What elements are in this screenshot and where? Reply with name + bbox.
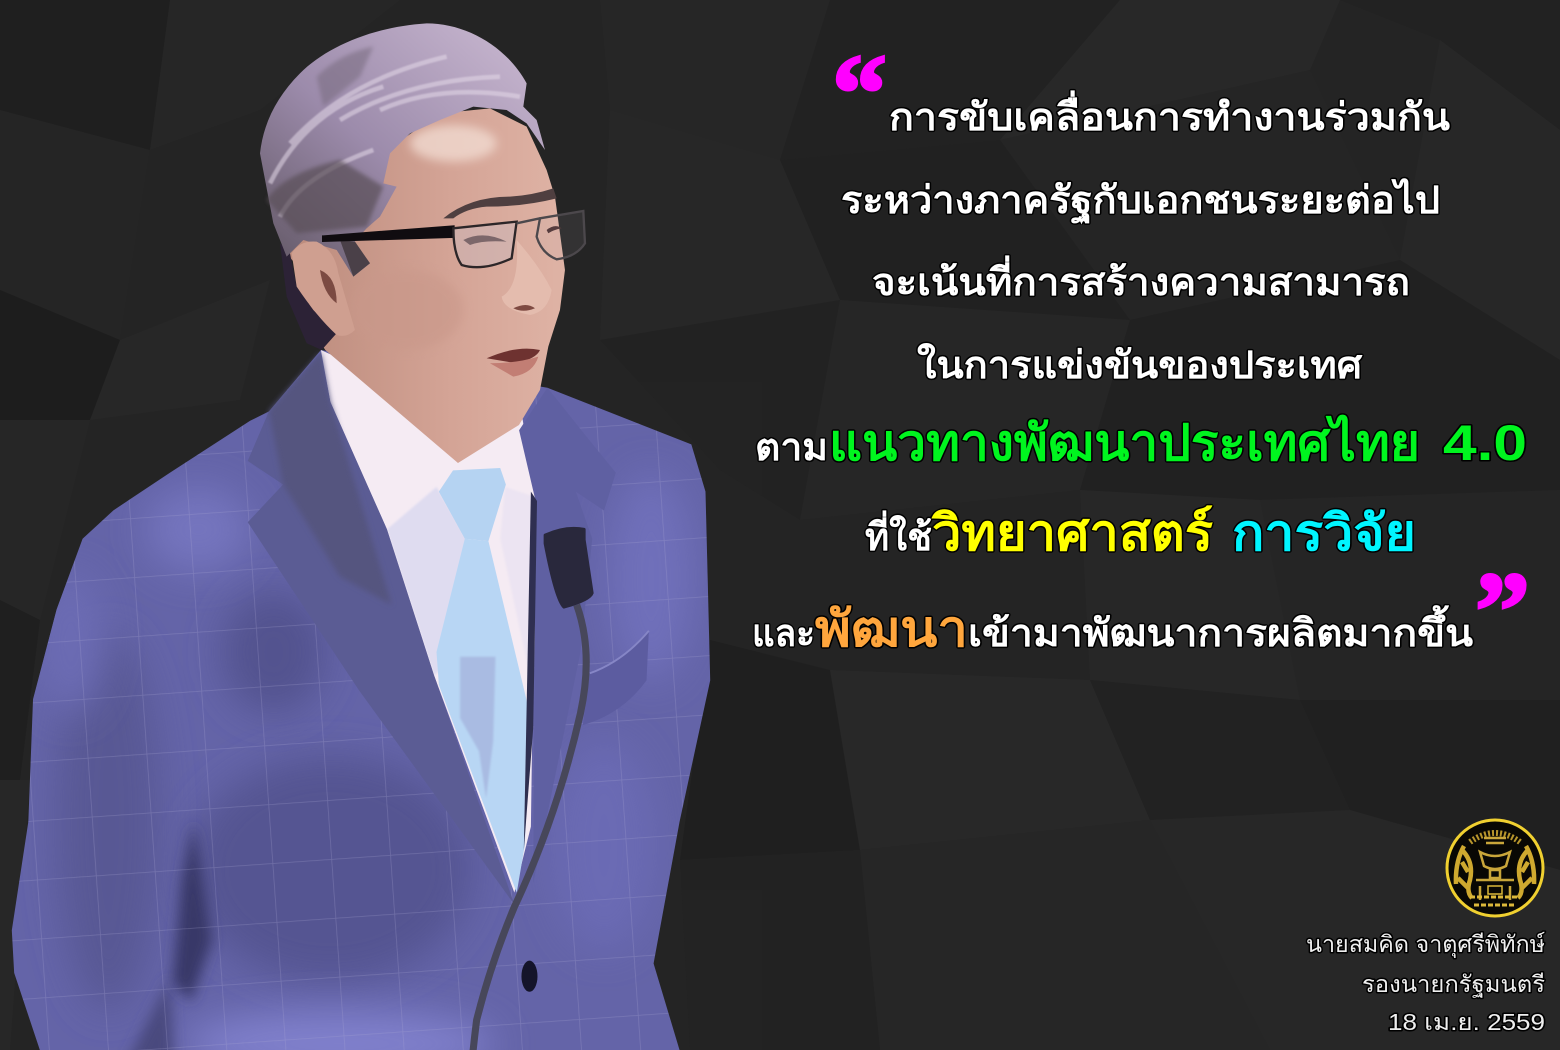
quote text: และ — [752, 613, 815, 655]
quote text: ที่ใช้ — [865, 510, 932, 559]
pocket — [583, 631, 649, 725]
highlight: green phrase: 4.0 — [1443, 415, 1527, 471]
person: speaker with microphone — [0, 23, 740, 1050]
quote text: จะเน้นที่การสร้างความสามารถ — [872, 255, 1410, 304]
highlight: green phrase: แนวทางพัฒนาประเทศไทย — [829, 414, 1420, 471]
jacket button — [521, 961, 537, 992]
hair back — [280, 243, 337, 350]
face — [283, 108, 565, 463]
left lapel — [248, 352, 514, 904]
eye — [463, 235, 507, 245]
right lapel — [519, 388, 616, 883]
suit jacket — [0, 350, 740, 1050]
icon: government seal — [1447, 820, 1543, 916]
nose — [502, 240, 552, 315]
signature: name, position, date: นายสมคิด จาตุศรีพิทักษ์ — [1306, 931, 1546, 958]
quote text: ในการแข่งขันของประเทศ — [917, 343, 1363, 387]
quote text: ตาม — [755, 427, 828, 469]
quote text: การขับเคลื่อนการทำงานร่วมกัน — [889, 90, 1450, 139]
quote: opening mark: “ — [832, 32, 887, 154]
shirt — [321, 350, 536, 893]
signature: name, position, date — [1306, 931, 1546, 1035]
hair — [260, 23, 545, 277]
eyebrows — [443, 188, 557, 218]
signature: name, position, date: 18 เม.ย. 2559 — [1388, 1009, 1545, 1035]
quote text: ระหว่างภาครัฐกับเอกชนระยะต่อไป — [841, 178, 1440, 225]
mouth — [487, 349, 540, 363]
ear — [292, 241, 355, 336]
signature: name, position, date: รองนายกรัฐมนตรี — [1362, 971, 1545, 998]
highlight: yellow word: วิทยาศาสตร์ — [931, 505, 1213, 561]
quote text — [752, 90, 1527, 657]
glasses — [323, 227, 453, 241]
quote text: เข้ามาพัฒนาการผลิตมากขึ้น — [968, 605, 1473, 655]
necktie — [437, 468, 531, 893]
microphone — [470, 528, 592, 1050]
highlight: cyan word: การวิจัย — [1232, 505, 1416, 561]
quote: closing mark: ” — [1475, 550, 1530, 672]
highlight: orange word: พัฒนา — [815, 601, 968, 657]
head — [260, 23, 585, 463]
